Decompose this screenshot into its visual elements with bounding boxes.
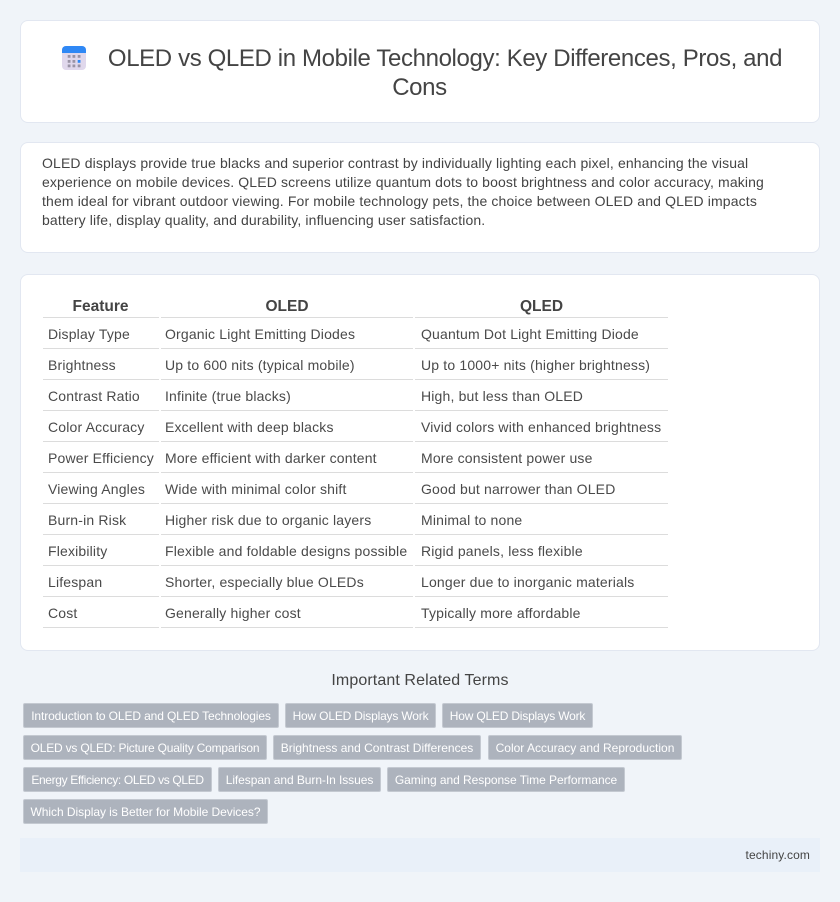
introduction text: them ideal for vibrant outdoor viewing. For mobile technology pets, the choice between OLED and QLED impacts [42, 193, 757, 209]
title: Cons [392, 74, 447, 101]
panel: title card [20, 20, 820, 123]
title: OLED vs QLED in Mobile Technology: Key Differences, Pros, and [108, 45, 782, 72]
comparison table: Lifespan [48, 574, 102, 590]
related term tags: Gaming and Response Time Performance [395, 773, 617, 787]
comparison table: Higher risk due to organic layers [165, 512, 371, 528]
comparison table: Organic Light Emitting Diodes [165, 326, 355, 342]
comparison table: Longer due to inorganic materials [421, 574, 634, 590]
related term tags [23, 703, 682, 824]
comparison table: Infinite (true blacks) [165, 388, 291, 404]
comparison table: Power Efficiency [48, 450, 154, 466]
comparison table: Cost [48, 605, 77, 621]
introduction text: OLED displays provide true blacks and superior contrast by individually lighting each pixel, enhancing the visual [42, 155, 748, 171]
comparison table: Vivid colors with enhanced brightness [421, 419, 661, 435]
comparison table: Burn-in Risk [48, 512, 126, 528]
related term tags: Color Accuracy and Reproduction [496, 741, 674, 755]
heading: important related terms: Important Related Terms [331, 672, 509, 689]
comparison table: Minimal to none [421, 512, 522, 528]
related term tags: Brightness and Contrast Differences [281, 741, 473, 755]
title [108, 45, 782, 101]
comparison table: Brightness [48, 357, 116, 373]
table header: OLED [265, 298, 309, 315]
related term tags: OLED vs QLED: Picture Quality Comparison [31, 741, 259, 755]
comparison table: High, but less than OLED [421, 388, 583, 404]
comparison table: Rigid panels, less flexible [421, 543, 583, 559]
comparison table: Viewing Angles [48, 481, 145, 497]
comparison table: Good but narrower than OLED [421, 481, 615, 497]
table header: Feature [72, 298, 128, 315]
icon: calendar [62, 46, 86, 70]
footer source: techiny.com [746, 848, 810, 862]
comparison table: Up to 600 nits (typical mobile) [165, 357, 355, 373]
related term tags: How OLED Displays Work [293, 709, 428, 723]
footer bar [20, 838, 820, 872]
panel: introduction card [20, 142, 820, 253]
comparison table: Excellent with deep blacks [165, 419, 334, 435]
comparison table: Flexibility [48, 543, 107, 559]
related term tags: Energy Efficiency: OLED vs QLED [31, 773, 204, 787]
comparison table: Color Accuracy [48, 419, 145, 435]
related term tags: Lifespan and Burn-In Issues [226, 773, 373, 787]
panel: comparison table card [20, 274, 820, 651]
introduction text: experience on mobile devices. QLED screens utilize quantum dots to boost brightness and color accuracy, making [42, 174, 764, 190]
comparison table: Shorter, especially blue OLEDs [165, 574, 364, 590]
comparison table: Display Type [48, 326, 130, 342]
related term tags: Introduction to OLED and QLED Technologies [31, 709, 271, 723]
table header: QLED [520, 298, 563, 315]
comparison table: More consistent power use [421, 450, 593, 466]
related term tags: How QLED Displays Work [450, 709, 585, 723]
comparison table: Generally higher cost [165, 605, 301, 621]
comparison table: Typically more affordable [421, 605, 581, 621]
comparison table: Flexible and foldable designs possible [165, 543, 407, 559]
introduction text: battery life, display quality, and durability, influencing user satisfaction. [42, 212, 485, 228]
introduction text [42, 155, 764, 228]
table header [43, 298, 668, 318]
related term tags: Which Display is Better for Mobile Devices? [31, 805, 260, 819]
comparison table: Quantum Dot Light Emitting Diode [421, 326, 639, 342]
comparison table: More efficient with darker content [165, 450, 377, 466]
comparison table: Wide with minimal color shift [165, 481, 347, 497]
comparison table: Contrast Ratio [48, 388, 140, 404]
comparison table: Up to 1000+ nits (higher brightness) [421, 357, 650, 373]
